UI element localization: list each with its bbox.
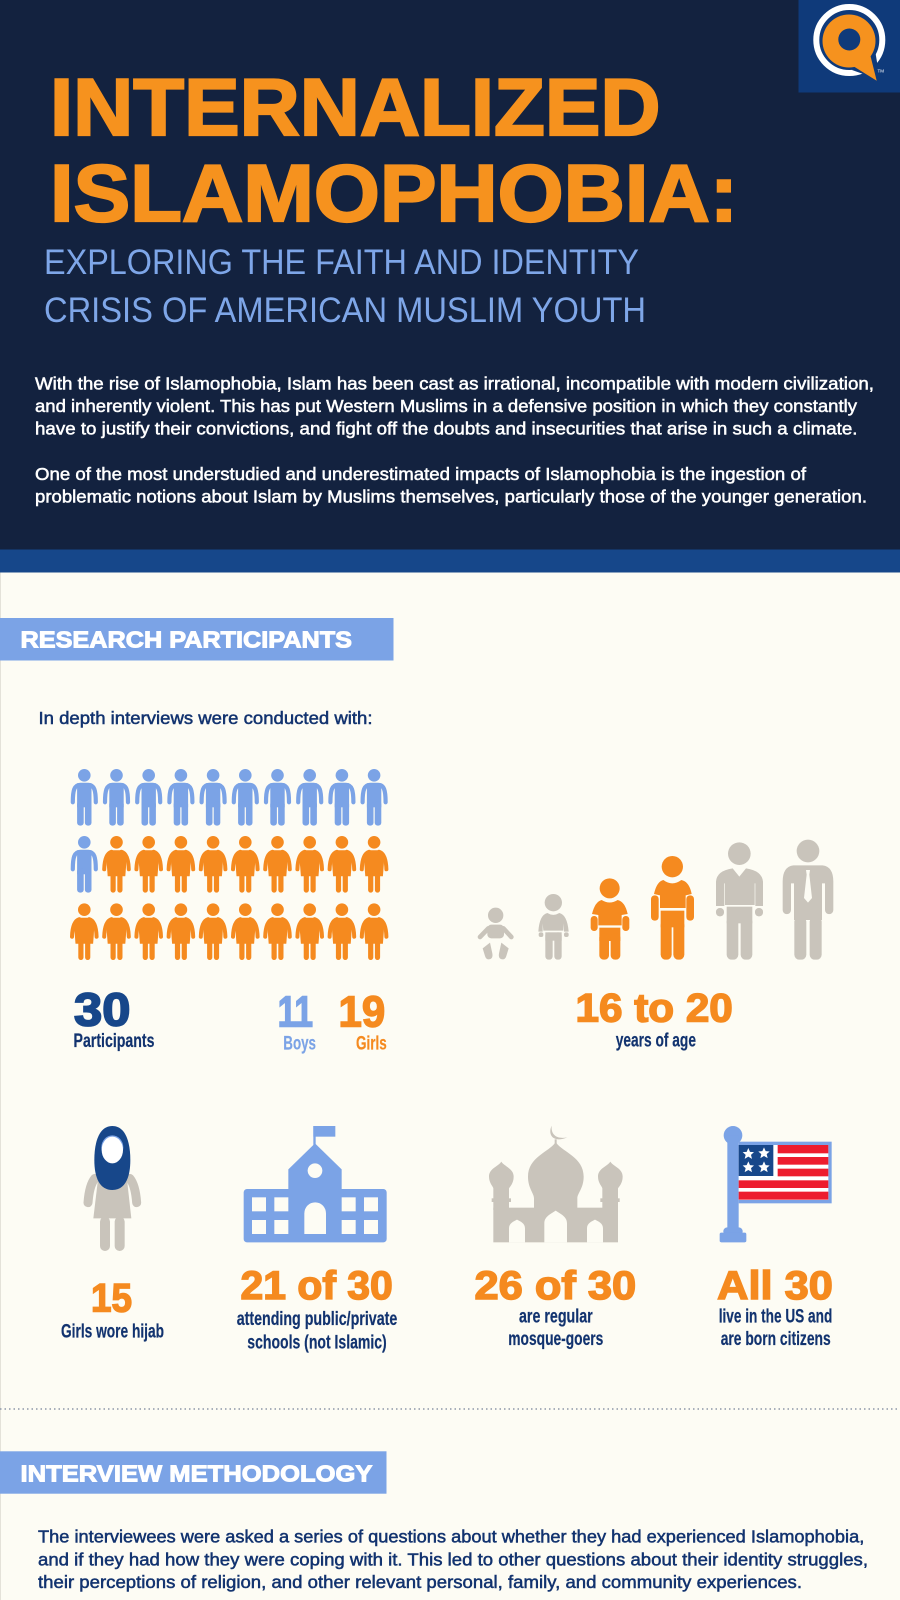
heading: research participants [0,618,394,660]
title [50,63,738,239]
heading: interview methodology: INTERVIEW METHODOLOGY [20,1461,373,1487]
stat: 26 of 30 [474,1264,636,1350]
stat: all 30: are born citizens [721,1329,831,1350]
stat: 26 of 30: mosque-goers [508,1329,603,1350]
stat: 11 boys [278,988,316,1054]
text: interviews intro: In depth interviews were conducted with: [38,708,372,728]
subtitle: EXPLORING THE FAITH AND IDENTITY [44,243,639,282]
text block: methodology: their perceptions of religion, and other relevant personal, family, and community experiences. [38,1572,802,1592]
stat: 30 participants: 30 [74,984,130,1036]
icon: Q logo [798,0,900,92]
subtitle [44,243,646,330]
blue band [0,550,900,572]
icon: child [538,894,569,960]
stat: all 30: live in the US and [719,1306,832,1327]
panel: header [0,0,900,550]
subtitle: CRISIS OF AMERICAN MUSLIM YOUTH [44,291,646,330]
icon: mosque [489,1126,623,1242]
chart: 30 participant pictogram [72,769,386,960]
heading: interview methodology [0,1451,386,1494]
stat: 26 of 30: are regular [519,1306,593,1327]
stat: 11 boys: 11 [278,988,313,1037]
intro text block: problematic notions about Islam by Muslims themselves, particularly those of the younger generation. [35,487,867,507]
stat: 15 girls wore hijab [61,1277,164,1342]
icon: baby [480,908,511,959]
icon: US flag [720,1126,832,1242]
icon: girl with hijab [88,1126,137,1251]
stat: 30 participants: Participants [74,1031,154,1052]
intro text block [35,374,874,507]
stat: 15 girls wore hijab: Girls wore hijab [61,1321,164,1342]
icon: age progression figures [480,840,833,960]
stat: 21 of 30: 21 of 30 [240,1264,393,1308]
stat: 16 to 20 years [576,987,733,1052]
text block: methodology: The interviewees were asked a series of questions about whether they had experienced Islamophobia, [38,1527,864,1547]
icon: adult with tie [783,840,833,960]
icon: adult sweater [716,842,763,960]
stat: 16 to 20 years: 16 to 20 [576,987,733,1031]
text block: methodology: and if they had how they were coping with it. This led to other questions about their identity struggles, [38,1550,868,1570]
icon: Q logo: TM [878,68,884,74]
stat: 11 boys: Boys [283,1033,316,1054]
text block: methodology [38,1527,868,1592]
stat: 21 of 30: schools (not Islamic) [247,1332,387,1353]
stat: 19 girls: Girls [356,1033,387,1054]
stat: 15 girls wore hijab: 15 [91,1277,132,1321]
stat: all 30 [717,1264,833,1350]
stat: 26 of 30: 26 of 30 [474,1264,636,1308]
stat: 16 to 20 years: years of age [616,1031,696,1052]
icon: teen orange tall [651,856,694,960]
stat: all 30: All 30 [717,1264,833,1308]
icon: school [244,1126,387,1242]
stat: 21 of 30 [237,1264,397,1353]
intro text block: One of the most understudied and underestimated impacts of Islamophobia is the ingestion of [35,464,806,484]
title: INTERNALIZED [50,63,660,153]
title: ISLAMOPHOBIA: [50,149,738,239]
icon: teen orange small [591,878,629,960]
intro text block: have to justify their convictions, and fight off the doubts and insecurities that arise in such a climate. [35,419,858,439]
stat: 19 girls: 19 [338,988,385,1036]
stat: 30 participants [74,984,154,1052]
intro text block: and inherently violent. This has put Western Muslims in a defensive position in which they constantly [35,396,857,416]
heading: research participants: RESEARCH PARTICIPANTS [20,627,352,653]
intro text block: With the rise of Islamophobia, Islam has been cast as irrational, incompatible with modern civilization, [35,374,874,394]
stat: 21 of 30: attending public/private [237,1309,397,1330]
